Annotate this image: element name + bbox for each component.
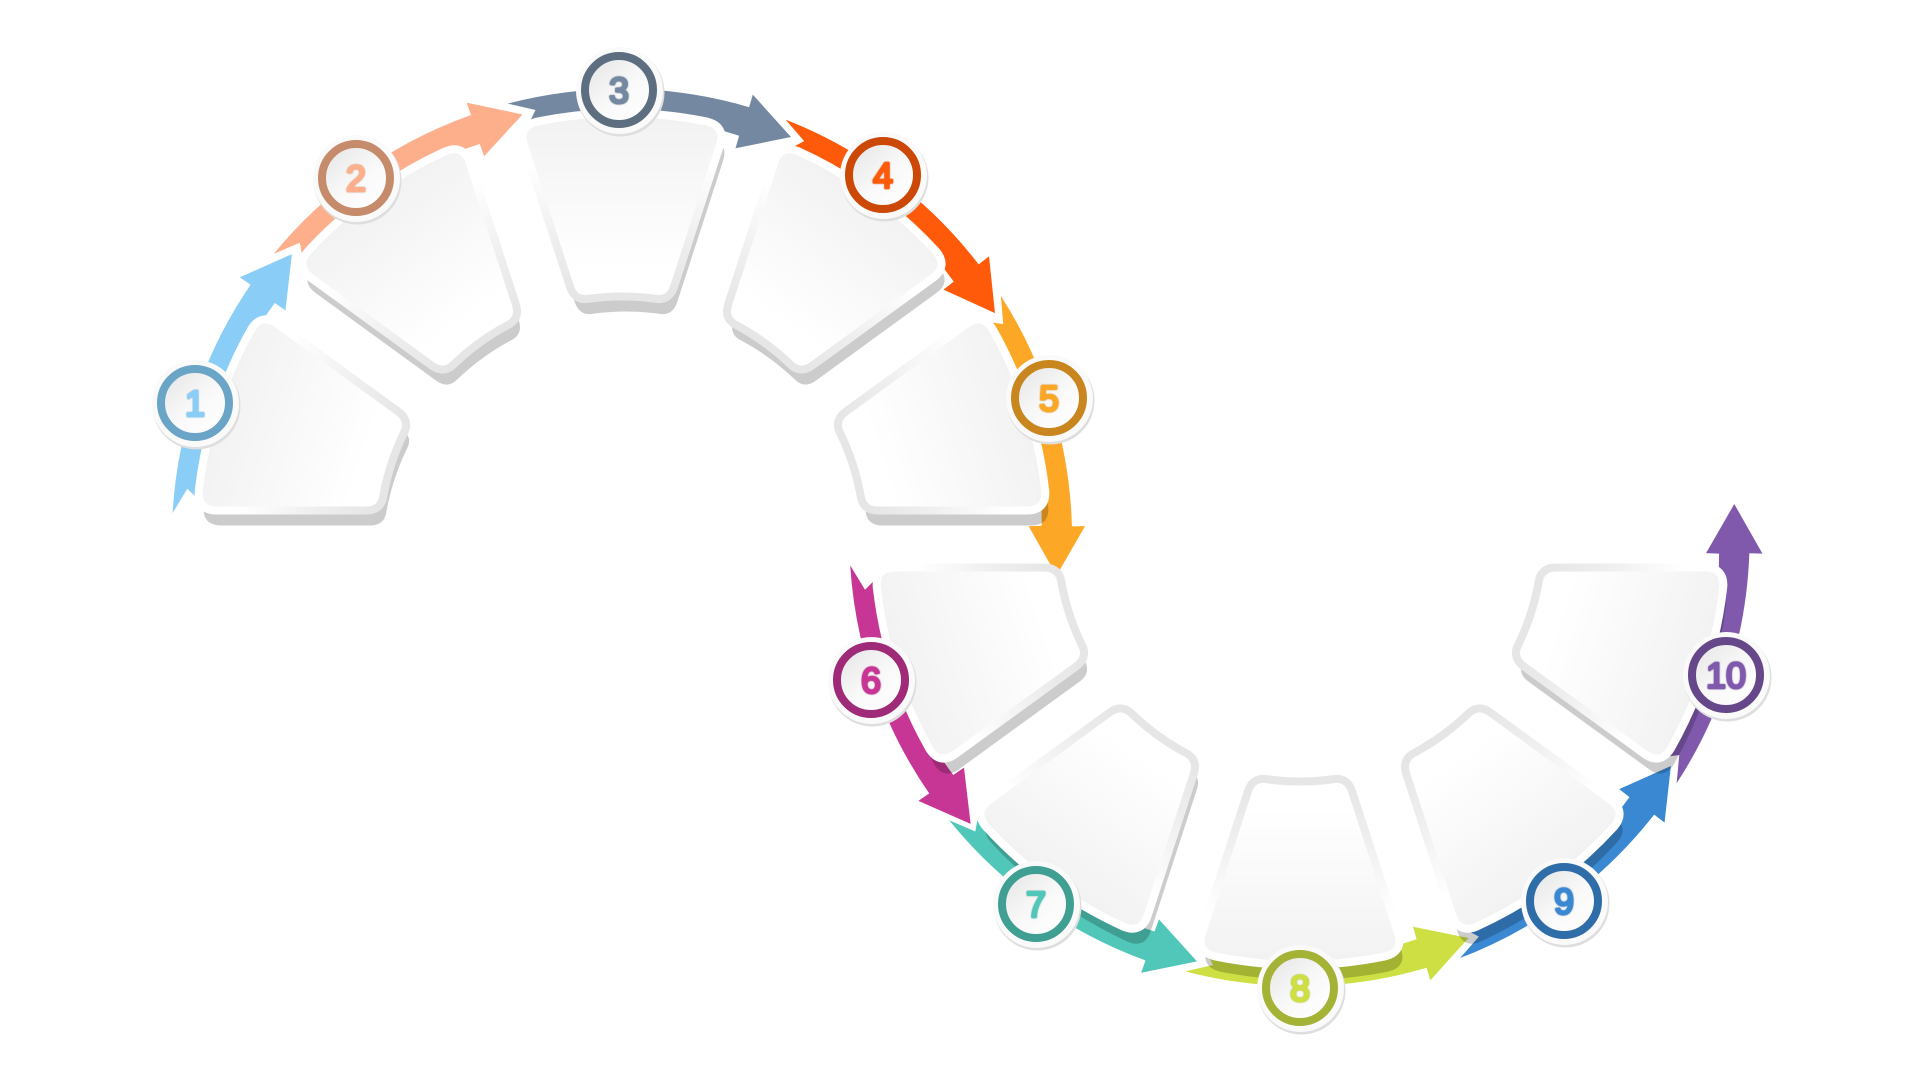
arrow 5 [958, 291, 1102, 579]
badge 3: 3 [609, 70, 629, 111]
badge 2 [313, 135, 402, 224]
badge 10: 10 [1706, 655, 1746, 696]
badge 5: 5 [1039, 378, 1059, 419]
panel 3 [527, 117, 717, 295]
badge 9 [1521, 858, 1610, 948]
panel 6 [869, 524, 1098, 760]
arrow 6 [836, 551, 981, 839]
panel 9 [1366, 680, 1625, 937]
badge 7: 7 [1026, 884, 1046, 925]
arrow 9 [1434, 757, 1699, 970]
badge 2: 2 [346, 158, 366, 199]
badge 4 [840, 132, 928, 222]
badge 3 [576, 47, 664, 136]
badge 5 [1006, 355, 1094, 444]
arrows: upper arc [159, 76, 1102, 579]
badge 1 [152, 360, 240, 450]
arrow 4 [759, 108, 1023, 322]
arrow 2 [265, 76, 529, 290]
badge 7 [993, 861, 1082, 950]
badge 6: 6 [861, 660, 881, 701]
badge 10 [1683, 632, 1772, 722]
badge 4: 4 [873, 155, 893, 196]
badge 8: 8 [1290, 968, 1310, 1009]
arrow 7 [940, 784, 1204, 1000]
arrow 3 [508, 89, 791, 148]
panel 8 [1205, 783, 1395, 961]
panel 5 [824, 318, 1053, 554]
panel 2 [297, 141, 556, 398]
arrow 10 [1634, 500, 1780, 788]
badge 9: 9 [1554, 881, 1574, 922]
panel 4 [688, 141, 947, 398]
panel drop shadows [195, 133, 1735, 977]
panel 1 [191, 318, 420, 554]
badge 8 [1257, 945, 1346, 1034]
badge 6 [828, 637, 916, 726]
arrow 8 [1185, 927, 1468, 986]
panel 7 [975, 680, 1234, 937]
panel 10 [1502, 524, 1731, 760]
badge 1: 1 [185, 383, 205, 424]
panels [191, 117, 1731, 961]
arrow 1 [159, 239, 303, 527]
arrows: lower arc [836, 500, 1780, 1000]
